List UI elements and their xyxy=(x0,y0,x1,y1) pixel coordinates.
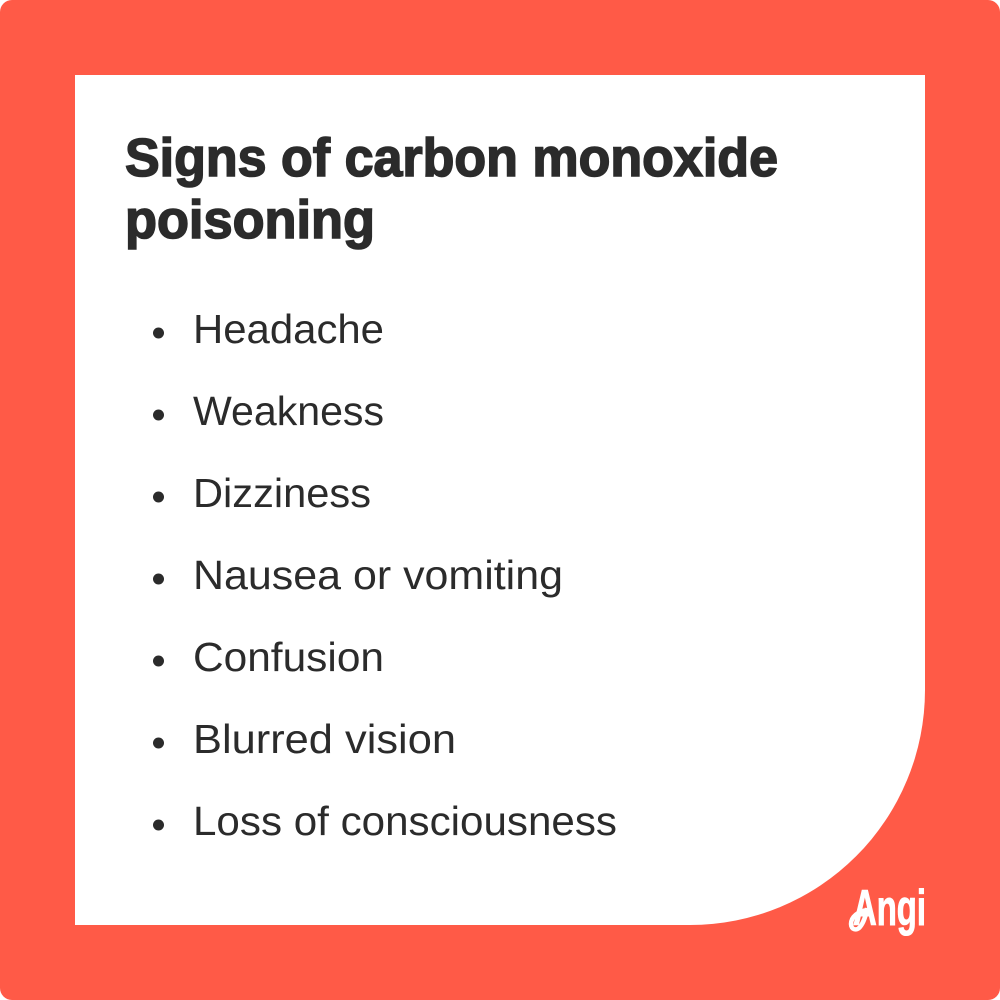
list item: Weakness: Weakness xyxy=(193,388,384,434)
list item: Headache: Headache xyxy=(193,306,384,352)
bullet list of symptoms xyxy=(153,306,617,844)
list item: Confusion: Confusion xyxy=(193,634,384,680)
title xyxy=(125,128,778,250)
Angi logo xyxy=(851,880,926,936)
Angi logo: Angi xyxy=(853,880,926,936)
list item: Dizziness: Dizziness xyxy=(193,470,371,516)
title: Signs of carbon monoxide xyxy=(125,128,778,188)
list item: Blurred vision: Blurred vision xyxy=(193,716,456,762)
white content panel xyxy=(75,75,925,925)
list item: Loss of consciousness: Loss of consciousness xyxy=(193,798,617,844)
title: poisoning xyxy=(125,190,375,250)
list item: Nausea or vomiting: Nausea or vomiting xyxy=(193,552,563,598)
